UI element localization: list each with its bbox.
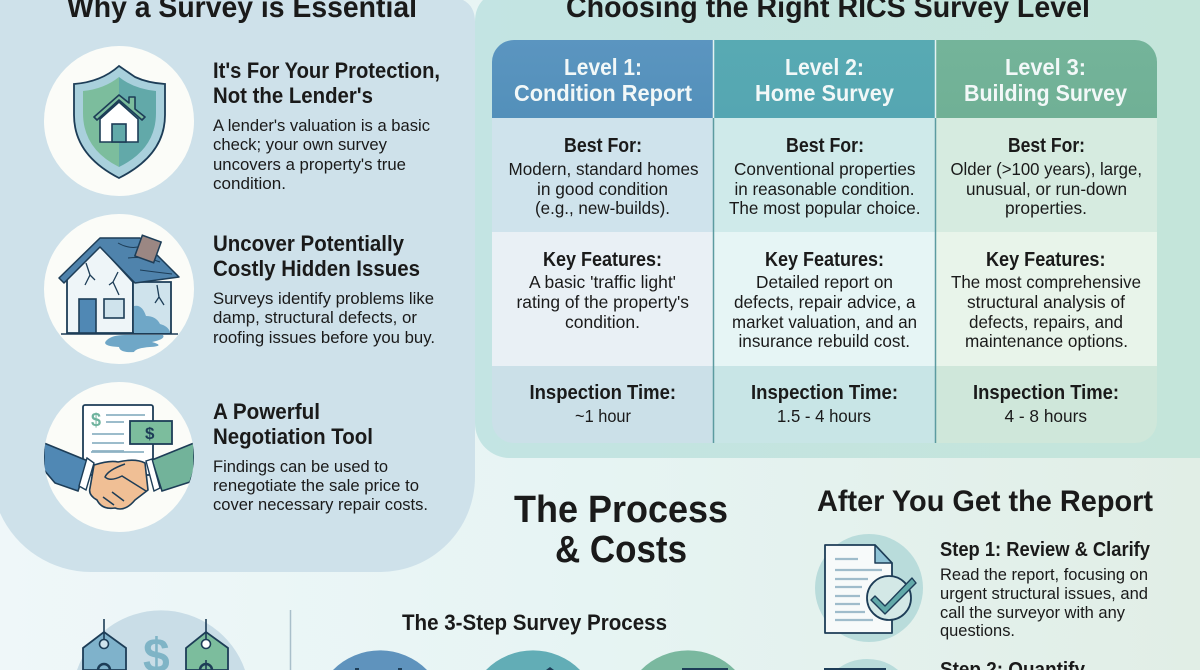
heading: protection: It's For Your Protection, [213, 58, 440, 83]
text: negotiation body [213, 458, 428, 514]
heading: after you get the report: After You Get the Report [817, 485, 1153, 518]
text: hidden issues body [213, 290, 435, 347]
column: level 1: Inspection Time: [530, 382, 676, 404]
panel: choosing the right RICS survey level [475, 0, 1200, 458]
text: protection body: condition. [213, 175, 286, 193]
column: level 3: 4 - 8 hours [1004, 406, 1087, 426]
heading: negotiation: A Powerful [213, 399, 320, 424]
heading: the process and costs [514, 489, 728, 571]
heading: protection [213, 58, 440, 108]
column: level 1 [508, 54, 699, 426]
column: level 2: Conventional properties [734, 159, 916, 179]
step circle 3 [641, 650, 735, 670]
text: protection body: check; your own survey [213, 136, 388, 154]
text: protection body: uncovers a property's true [213, 156, 406, 174]
column: level 3: Building Survey [964, 80, 1127, 106]
heading: hidden issues: Costly Hidden Issues [213, 256, 420, 281]
icon: handshake [44, 382, 194, 532]
column: level 3: Best For: [1008, 135, 1085, 157]
column: level 1: Modern, standard homes [508, 159, 699, 179]
icon: handshake: $ [91, 410, 101, 430]
heading: the process and costs: The Process [514, 489, 728, 531]
text: hidden issues body: Surveys identify problems like [213, 290, 434, 308]
icon: report with check [815, 534, 923, 642]
column: level 1: condition. [565, 312, 640, 332]
column: level 3 [950, 54, 1142, 426]
column: level 2: Inspection Time: [751, 382, 898, 404]
column: level 1: in good condition [537, 179, 668, 199]
heading: negotiation [213, 399, 373, 449]
column: level 2: 1.5 - 4 hours [777, 406, 871, 426]
column: level 1: (e.g., new-builds). [535, 198, 670, 218]
column: level 2: market valuation, and an [732, 312, 917, 332]
icon: handshake: $ [145, 424, 155, 443]
heading: hidden issues: Uncover Potentially [213, 231, 405, 256]
column: level 2: insurance rebuild cost. [738, 331, 910, 351]
column: level 3: Key Features: [986, 249, 1106, 271]
column: level 1: Key Features: [543, 249, 662, 271]
column: level 2: in reasonable condition. [734, 179, 914, 199]
column: level 2 [729, 54, 920, 426]
column: level 3: unusual, or run-down [966, 179, 1127, 199]
heading: protection: Not the Lender's [213, 83, 373, 108]
text: step 1: Step 1: Review & Clarify [940, 539, 1151, 561]
text: protection body [213, 117, 430, 193]
text: protection body: A lender's valuation is a basic [213, 117, 430, 135]
icon: step 2 [824, 659, 898, 670]
column: level 3: defects, repairs, and [969, 312, 1123, 332]
column: level 3: maintenance options. [965, 331, 1128, 351]
text: step 1 [940, 539, 1151, 640]
column: level 2: defects, repair advice, a [734, 292, 916, 312]
heading: hidden issues [213, 231, 420, 281]
text: negotiation body: cover necessary repair costs. [213, 496, 428, 514]
item: protection [44, 46, 440, 196]
column: level 1: Best For: [564, 135, 642, 157]
heading: the 3-step survey process: The 3-Step Survey Process [402, 610, 667, 635]
section: after you get the report [815, 485, 1153, 670]
column: level 2: Home Survey [755, 80, 894, 106]
column: level 3: structural analysis of [967, 292, 1125, 312]
column: level 1: ~1 hour [575, 406, 631, 426]
table: survey level comparison [492, 40, 1157, 443]
column: level 1: Level 1: [564, 54, 642, 80]
item: hidden issues [44, 214, 435, 364]
column: level 1: rating of the property's [516, 292, 689, 312]
column: level 3: Older (>100 years), large, [950, 159, 1142, 179]
column: level 3: properties. [1005, 198, 1087, 218]
column: level 2: Key Features: [765, 249, 884, 271]
column: level 3: Inspection Time: [973, 382, 1119, 404]
text: step 1: Read the report, focusing on [940, 566, 1148, 584]
step circle 1 [333, 650, 427, 670]
column: level 2: Detailed report on [756, 272, 893, 292]
column: level 3: Level 3: [1005, 54, 1086, 80]
column: level 1: Condition Report [514, 80, 692, 106]
heading: the process and costs: & Costs [555, 529, 687, 571]
icon: damaged house [44, 214, 194, 364]
step circle 2 [486, 650, 580, 670]
column: level 3: The most comprehensive [951, 272, 1141, 292]
heading: negotiation: Negotiation Tool [213, 424, 373, 449]
text: negotiation body: Findings can be used to [213, 458, 388, 476]
column: level 2: Level 2: [785, 54, 864, 80]
icon: price tags [77, 610, 245, 670]
panel: why a survey is essential [0, 0, 475, 572]
column: level 2: Best For: [786, 135, 864, 157]
text: step 1: questions. [940, 622, 1015, 640]
text: negotiation body: renegotiate the sale price to [213, 477, 419, 495]
column: level 2: The most popular choice. [729, 198, 920, 218]
icon: shield with house [44, 46, 194, 196]
item: negotiation [44, 382, 428, 532]
text: hidden issues body: damp, structural defects, or [213, 309, 418, 327]
text: hidden issues body: roofing issues before you buy. [213, 329, 435, 347]
column: level 1: A basic 'traffic light' [529, 272, 676, 292]
text: step 1: urgent structural issues, and [940, 585, 1148, 603]
text: step 1: call the surveyor with any [940, 604, 1126, 622]
